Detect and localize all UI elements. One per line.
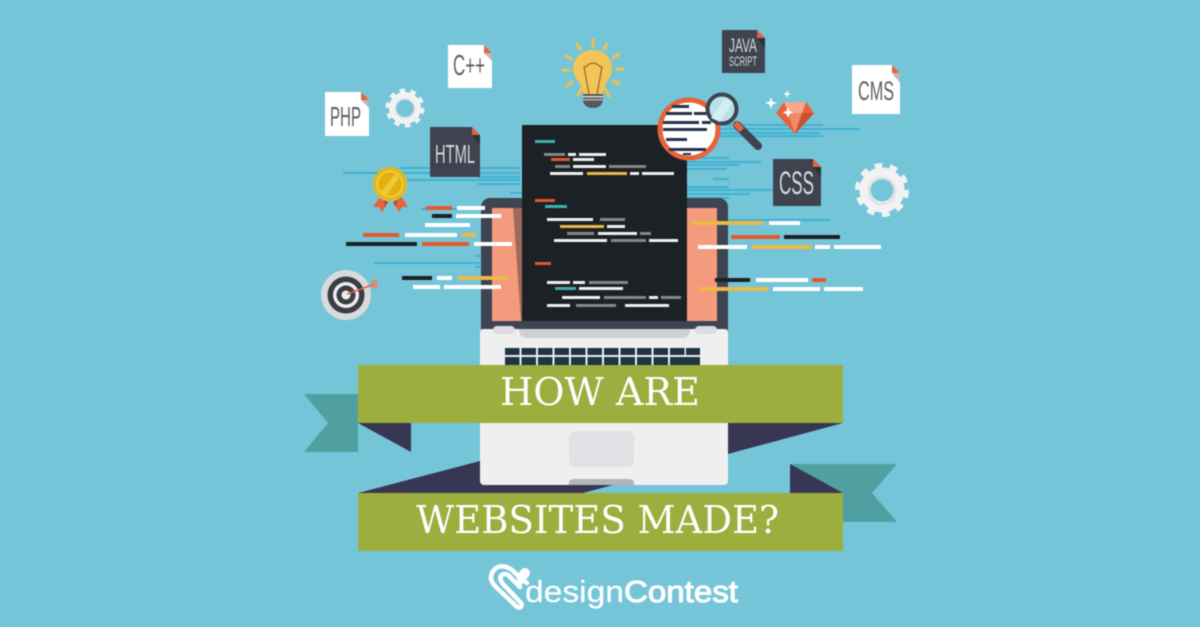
code dashes: right: [691, 221, 881, 291]
speed lines: blue background streaks: [343, 124, 860, 268]
icon: JavaScript document: SCRIPT: [729, 53, 757, 69]
icon: C++ document: [448, 45, 492, 88]
ribbon: right tail: [790, 464, 897, 522]
icon: magnifying glass: [708, 94, 758, 146]
laptop: [480, 198, 728, 485]
trackpad: [569, 431, 634, 467]
logo wordmark: Contest: [624, 574, 738, 609]
code panel: [522, 125, 687, 321]
icon: CSS document: [773, 159, 821, 206]
icon: JavaScript document: [722, 30, 765, 73]
icon: CMS document: [852, 65, 900, 114]
hinge: [493, 326, 717, 338]
icon: HTML document: [430, 127, 480, 177]
icon: medal: [373, 168, 408, 212]
icon: target with dart: [321, 270, 378, 320]
laptop lid: [481, 198, 728, 332]
ribbon: left tail: [304, 394, 411, 452]
laptop screen right: [687, 208, 717, 321]
logo heart mark: [491, 566, 530, 608]
ribbon banner: bottom: [358, 493, 843, 551]
laptop screen shadow: [513, 208, 522, 321]
laptop front notch: [569, 479, 634, 485]
ribbon: diagonal dark fold: [358, 423, 843, 493]
code dashes: left: [346, 206, 512, 289]
laptop screen left: [492, 208, 522, 321]
heading line 2: WEBSITES MADE?: [416, 498, 779, 542]
ribbon banner: top: [358, 365, 843, 423]
icon: magnified code circle: [660, 100, 718, 158]
logo: designContest: [491, 566, 738, 609]
icon: JavaScript document: JAVA: [729, 36, 757, 57]
icon: CMS document: CMS: [858, 76, 894, 106]
icon: light bulb: [563, 40, 623, 108]
icon: PHP document: [325, 92, 369, 136]
icon: large gear: [858, 166, 906, 214]
code lines: [535, 140, 681, 307]
logo wordmark: design: [525, 574, 624, 609]
icon: small gear: [388, 91, 422, 125]
icon: PHP document: PHP: [330, 101, 361, 132]
keyboard: [505, 348, 700, 366]
icon: CSS document: CSS: [779, 165, 814, 201]
icon: HTML document: HTML: [435, 139, 475, 169]
icon: C++ document: C++: [453, 50, 485, 82]
laptop base: [480, 329, 728, 485]
heading line 1: HOW ARE: [500, 370, 700, 414]
icon: ruby gem: [765, 90, 814, 134]
